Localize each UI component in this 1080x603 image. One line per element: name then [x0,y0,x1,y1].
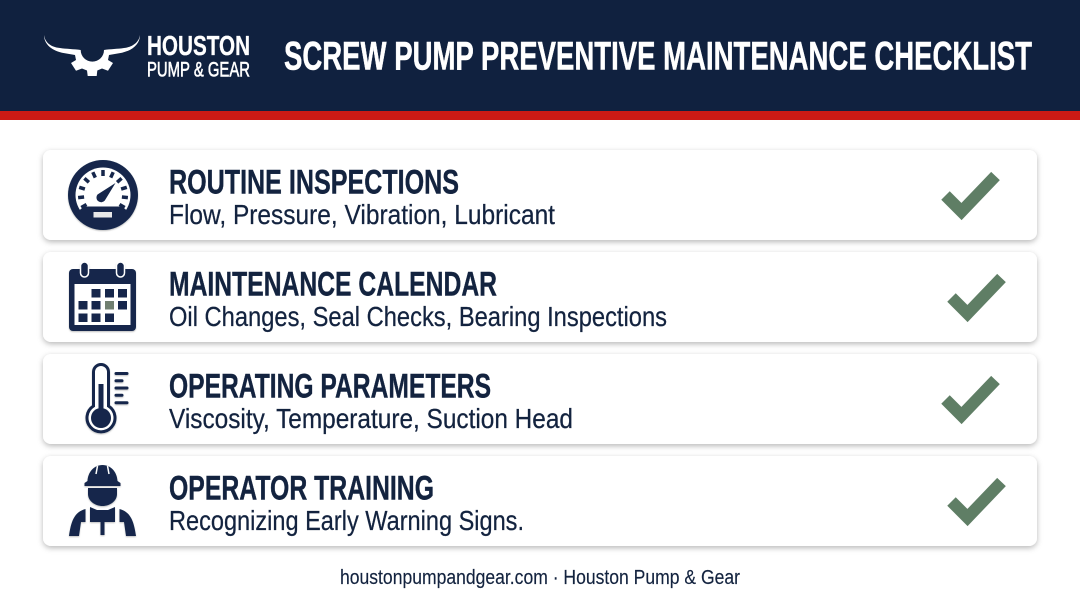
routine details: Flow, Pressure, Vibration, Lubricant [169,199,555,230]
panel: operator training [43,456,1037,546]
panel: routine inspections [43,150,1037,240]
parameters details: Viscosity, Temperature, Suction Head [169,403,573,434]
icon: check [952,482,1002,518]
panel: maintenance calendar [43,252,1037,342]
routine heading: ROUTINE INSPECTIONS [169,164,459,202]
logo [44,30,250,82]
logo wordmark: HOUSTON [147,30,250,61]
panel: operating parameters [43,354,1037,444]
training details: Recognizing Early Warning Signs. [169,505,524,536]
footer: houstonpumpandgear.com · Houston Pump & Gear [340,566,740,589]
logo wordmark [147,30,250,82]
parameters heading: OPERATING PARAMETERS [169,368,491,406]
icon: longhorn gear [44,35,140,76]
calendar heading: MAINTENANCE CALENDAR [169,266,497,304]
training heading: OPERATOR TRAINING [169,470,434,508]
icon: check [946,176,996,212]
calendar details: Oil Changes, Seal Checks, Bearing Inspections [169,301,667,332]
icon: worker [69,465,136,536]
icon: gauge [68,160,138,230]
icon: calendar [69,262,136,331]
logo wordmark: PUMP & GEAR [147,58,250,82]
icon: thermometer [87,365,127,432]
icon: check [952,278,1002,314]
icon: check [946,380,996,416]
header band [0,0,1080,120]
